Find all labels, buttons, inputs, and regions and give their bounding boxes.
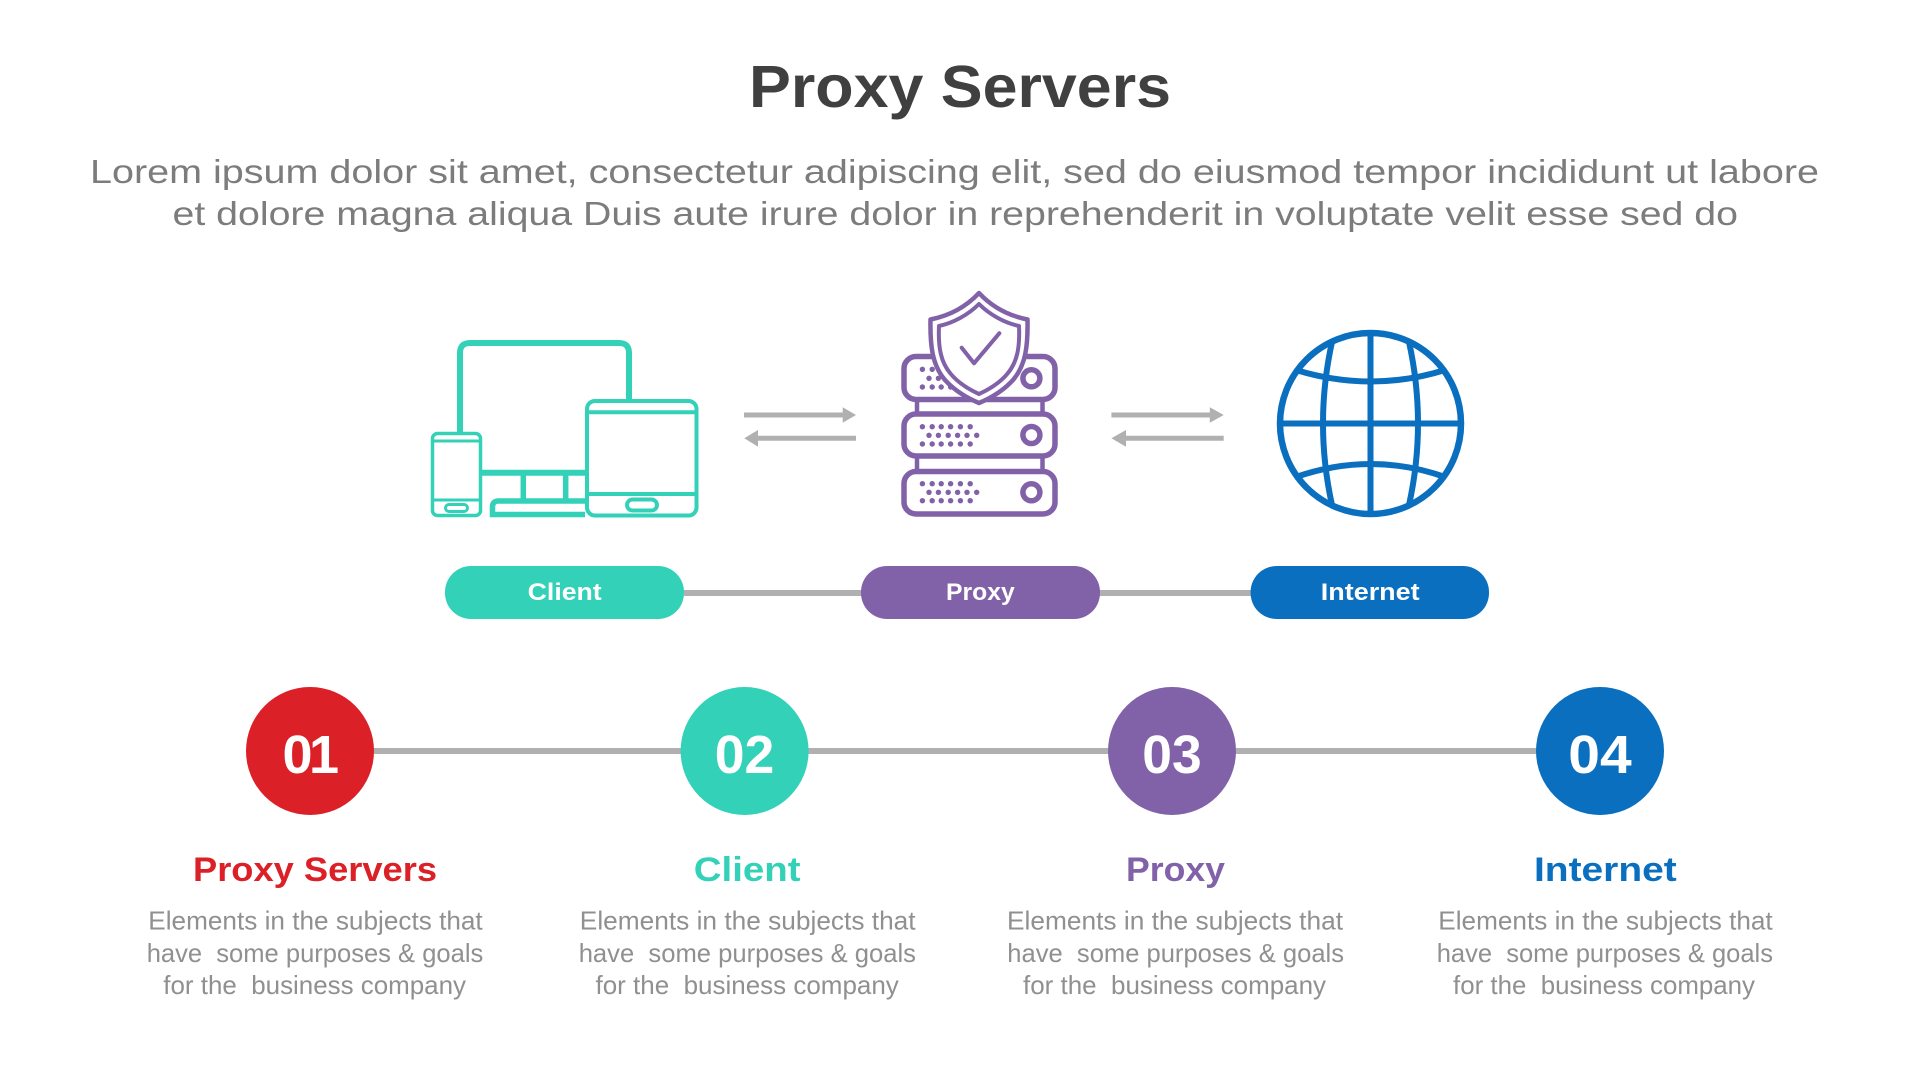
number circle 02: 02 <box>715 725 774 785</box>
icon: proxy server with shield <box>904 293 1055 514</box>
heading 03: Proxy <box>1126 851 1225 889</box>
step 04: internet <box>1437 687 1773 1000</box>
description 02 <box>579 905 916 1000</box>
heading 04: Internet <box>1534 851 1677 889</box>
number circle 02 <box>681 687 809 815</box>
connector line behind labels <box>684 590 1251 596</box>
timeline line <box>310 748 1600 754</box>
description 03: Elements in the subjects that <box>1007 905 1344 935</box>
heading 02: Client <box>694 851 800 889</box>
number circle 03: 03 <box>1142 725 1202 785</box>
step 02: client <box>579 687 916 1000</box>
icon: client devices <box>432 343 696 517</box>
number circle 01: 01 <box>282 725 339 785</box>
description 04: have some purposes & goals <box>1437 938 1773 968</box>
description 02: for the business company <box>596 970 899 1000</box>
icon: globe <box>1280 333 1461 514</box>
label pill: client <box>445 566 684 619</box>
heading 01: Proxy Servers <box>193 851 437 889</box>
description 03: have some purposes & goals <box>1007 938 1344 968</box>
label pill: proxy: Proxy <box>946 579 1015 606</box>
subtitle text block: Lorem ipsum dolor sit amet, consectetur adipiscing elit, sed do eiusmod tempor incididunt ut labore <box>90 153 1819 190</box>
number circle 03 <box>1108 687 1236 815</box>
number circle 04 <box>1536 687 1664 815</box>
description 01: for the business company <box>163 970 466 1000</box>
step 01: proxy servers <box>147 687 483 1000</box>
number circle 01 <box>246 687 374 815</box>
description 03: for the business company <box>1023 970 1326 1000</box>
label pill: internet: Internet <box>1321 579 1420 606</box>
arrows: proxy to internet <box>1111 407 1224 447</box>
label pill: internet <box>1251 566 1489 619</box>
description 01: have some purposes & goals <box>147 938 483 968</box>
arrows: client to proxy <box>744 407 856 447</box>
description 04: for the business company <box>1453 970 1755 1000</box>
step 03: proxy <box>1007 687 1344 1000</box>
description 01 <box>147 905 483 1000</box>
description 02: Elements in the subjects that <box>580 905 916 935</box>
title: Proxy Servers <box>749 54 1171 120</box>
description 03 <box>1007 905 1344 1000</box>
description 04 <box>1437 905 1773 1000</box>
subtitle text block <box>90 153 1819 232</box>
number circle 04: 04 <box>1568 725 1632 785</box>
description 04: Elements in the subjects that <box>1438 905 1773 935</box>
label pill: proxy <box>861 566 1100 619</box>
label pill: client: Client <box>528 579 602 606</box>
description 02: have some purposes & goals <box>579 938 916 968</box>
subtitle text block: et dolore magna aliqua Duis aute irure dolor in reprehenderit in voluptate velit esse sed do <box>172 195 1738 232</box>
description 01: Elements in the subjects that <box>148 905 483 935</box>
